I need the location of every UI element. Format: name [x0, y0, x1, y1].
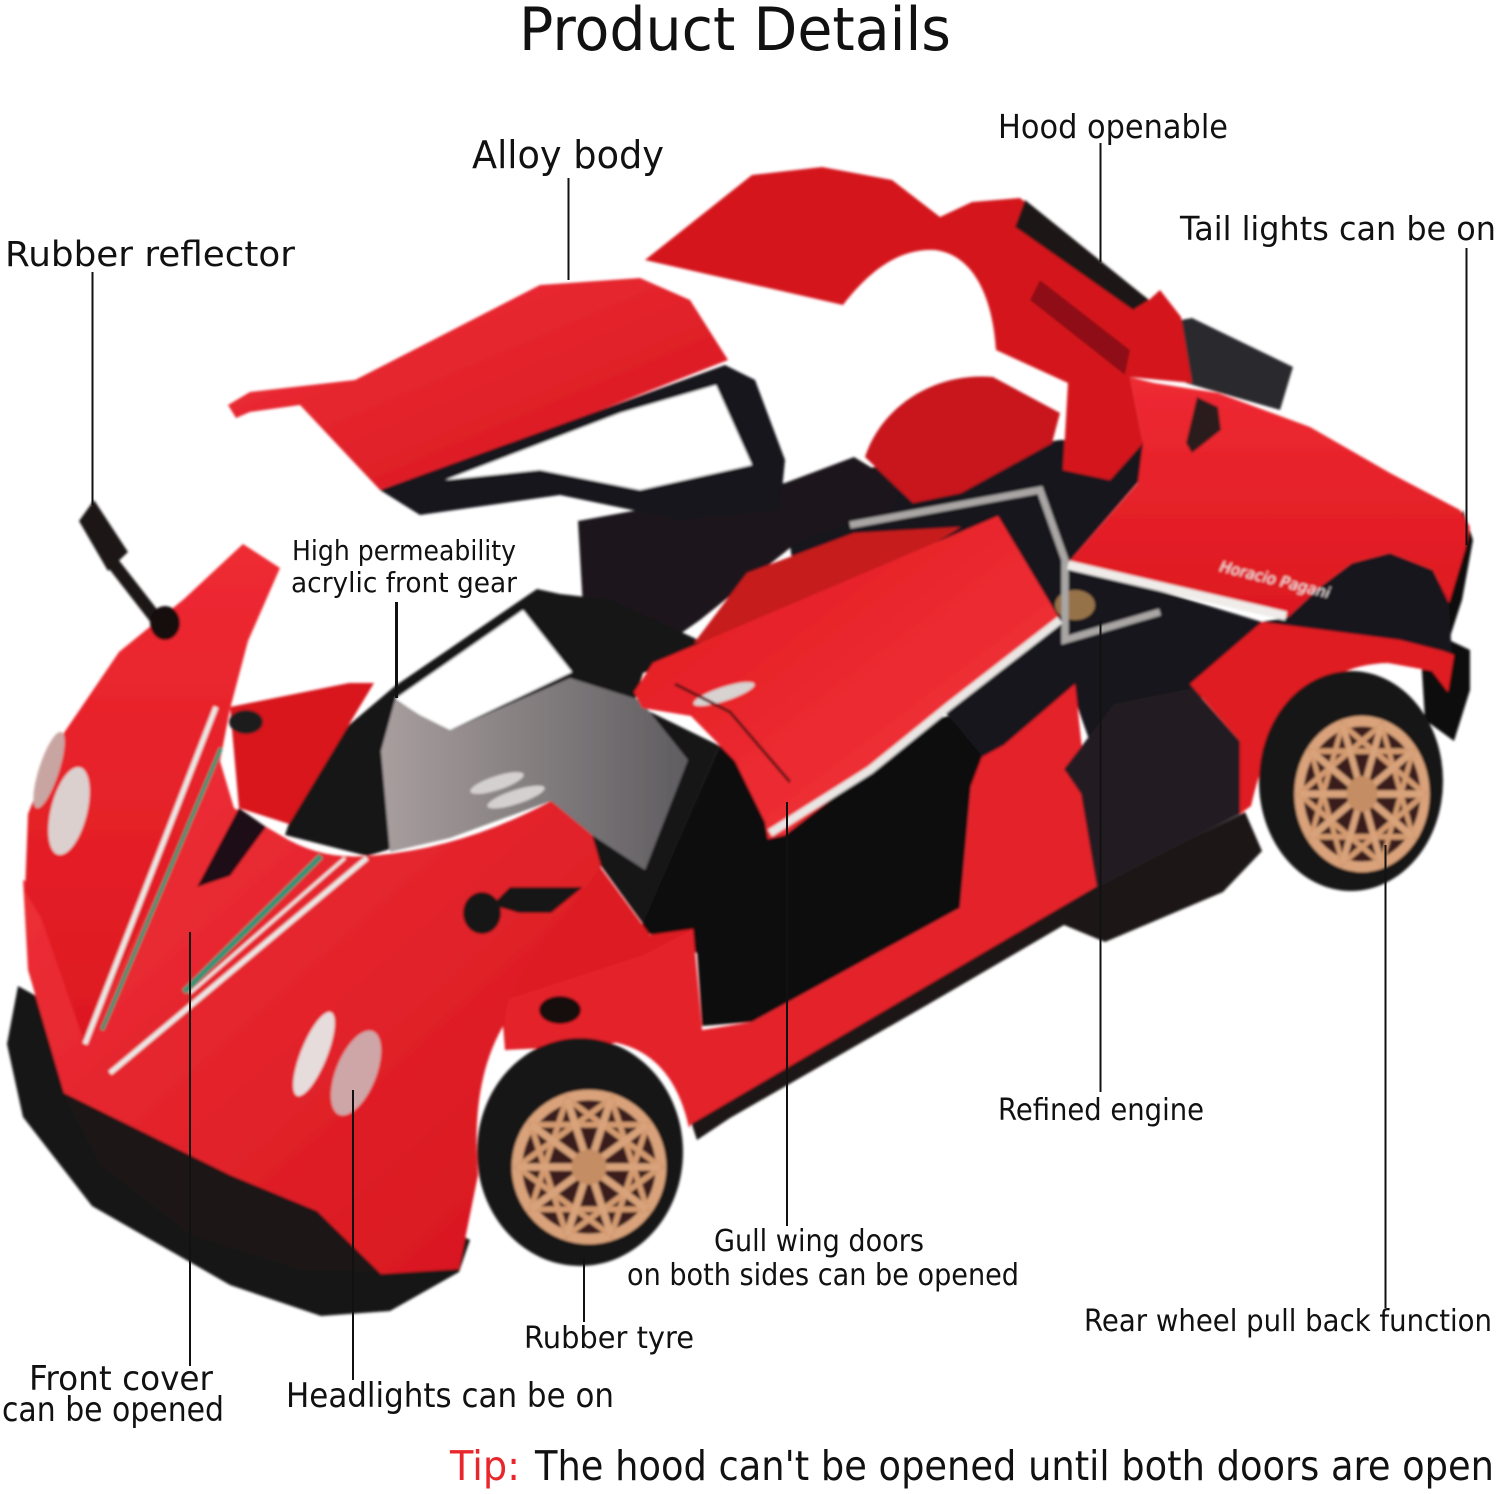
- hood inner detail: [1030, 280, 1130, 375]
- white hatch stripe: [1068, 565, 1286, 616]
- raised rear engine hood: [645, 167, 1192, 480]
- hood emblem: [197, 808, 266, 887]
- callout: Tail lights can be on: Tail lights can be on: [1179, 209, 1496, 248]
- white door stripe: [770, 620, 1060, 833]
- carbon vent on hatch: [1186, 397, 1221, 453]
- red interior hemisphere: [865, 377, 1060, 503]
- callout: Front cover can be opened: [2, 932, 224, 1430]
- headlights on flap: [27, 729, 97, 859]
- callout: Refined engine: Refined engine: [998, 1093, 1204, 1128]
- callout: Front cover can be opened: can be opened: [2, 1390, 224, 1430]
- callout: High permeability acrylic front gear: High permeability: [292, 534, 516, 567]
- callout: Rubber tyre: Rubber tyre: [524, 1321, 694, 1356]
- callout: Front cover can be opened: Front cover: [29, 1359, 213, 1399]
- hood stripes: [85, 707, 367, 1073]
- callout: Hood openable: Hood openable: [998, 107, 1228, 146]
- rear wheel: [1259, 671, 1443, 891]
- rubber side mirror: [79, 500, 180, 640]
- front headlights right: [285, 1007, 391, 1122]
- callout: Headlights can be on: Headlights can be on: [286, 1376, 614, 1416]
- windshield clear area: [395, 610, 572, 730]
- engine bay dark: [790, 440, 1262, 770]
- right side mirror: [463, 887, 583, 934]
- wheel well dark: [1262, 553, 1452, 660]
- engine pipework: [850, 490, 1160, 640]
- callout: Rubber reflector: Rubber reflector: [5, 235, 296, 275]
- rear spoiler panel: [1181, 318, 1293, 410]
- windshield glass: [381, 678, 688, 870]
- rear hatch open: [1068, 377, 1470, 617]
- windshield frame: [285, 589, 720, 924]
- hatch signature: Horacio Pagani: [1218, 557, 1333, 602]
- tip line: Tip:: [449, 1442, 520, 1490]
- interior reflections: [468, 768, 547, 813]
- left door window frame: [380, 365, 785, 520]
- left gull-wing door raised: [228, 278, 728, 490]
- red front compartment behind flap: [230, 683, 374, 824]
- engine detail: [1055, 590, 1095, 620]
- washer cap: [229, 710, 263, 734]
- callout: High permeability acrylic front gear: [291, 534, 517, 698]
- center red console: [694, 527, 961, 643]
- callout: Gull wing doors: Gull wing doors: [714, 1224, 924, 1259]
- front wheel: [477, 1038, 683, 1266]
- callout: Alloy body: Alloy body: [472, 133, 664, 177]
- door crease line: [675, 684, 790, 782]
- illustration: red model car with open doors: [7, 167, 1473, 1316]
- rear black tail: [1420, 510, 1473, 741]
- door window opening: [445, 385, 752, 490]
- black front splitter: [7, 986, 470, 1316]
- front grille: [64, 1096, 375, 1272]
- right gull-wing door raised: [634, 516, 1059, 839]
- callout: Gull wing doors: [627, 802, 1019, 1293]
- black side box: [1064, 688, 1240, 888]
- raised flap: [25, 544, 280, 1044]
- main hood body: [23, 761, 601, 1274]
- black upper door frame glass: [578, 457, 900, 660]
- callout: Gull wing doors: on both sides can be opened: [627, 1258, 1019, 1293]
- door handle: [691, 677, 757, 711]
- body side with door sill: [505, 684, 1097, 1128]
- side sill: [691, 812, 1262, 1140]
- callout: High permeability acrylic front gear: acrylic front gear: [291, 566, 517, 599]
- rear fender: [1190, 622, 1454, 814]
- interior dark: [640, 716, 985, 1026]
- hood black insert: [1015, 200, 1149, 310]
- red fender behind hood: [498, 860, 702, 1050]
- fuel cap: [539, 996, 581, 1024]
